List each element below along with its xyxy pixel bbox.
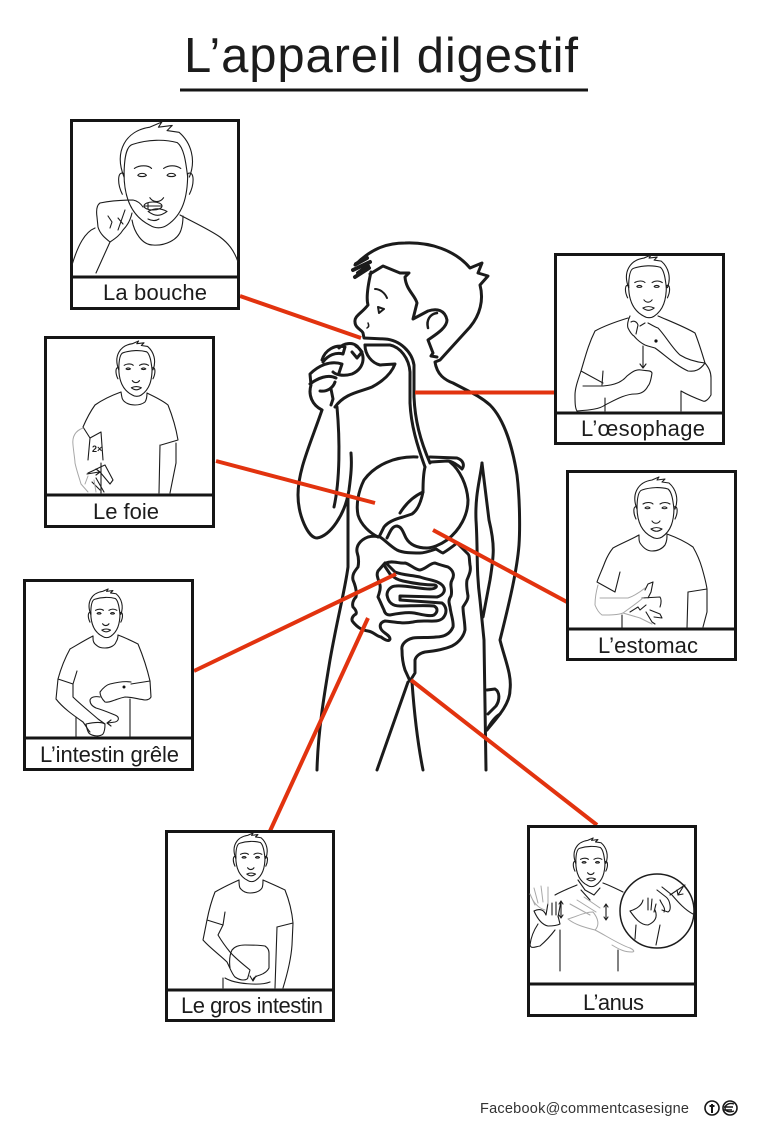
- icon: creative commons licence: [705, 1101, 737, 1115]
- ghost arm: [73, 428, 96, 492]
- sign figure: œsophage: [575, 255, 711, 411]
- ghost arm: [595, 585, 652, 624]
- label: l'estomac: L’estomac: [598, 633, 698, 658]
- red line: anus: [411, 680, 597, 825]
- label: le gros intestin: Le gros intestin: [181, 993, 323, 1018]
- sign figure: gros intestin: [203, 833, 293, 988]
- red line: large intestine: [270, 618, 368, 831]
- sign figure: anus: [530, 838, 694, 971]
- red line: esophagus: [415, 390, 555, 394]
- repeat mark: 2×: [92, 444, 102, 454]
- sign figure: foie: [83, 341, 178, 493]
- marker dot: [654, 339, 658, 343]
- panel: l'estomac: [566, 472, 737, 660]
- panel: la bouche: [70, 120, 240, 308]
- sign figure: estomac: [597, 477, 707, 628]
- panel: l'œsophage: [554, 254, 725, 444]
- red line: small intestine: [194, 574, 396, 671]
- panel: l'intestin grêle: [23, 580, 194, 770]
- red line: stomach: [433, 530, 567, 602]
- label: le foie: Le foie: [93, 499, 159, 524]
- body outline: [298, 243, 520, 770]
- panel: le gros intestin: [165, 832, 335, 1020]
- red line: liver: [216, 461, 375, 503]
- sign figure: intestin grêle: [56, 589, 151, 737]
- footer credit: Facebook@commentcasesigne: [480, 1101, 689, 1117]
- panel: l'anus: [527, 826, 697, 1016]
- title: L’appareil digestif: [184, 29, 578, 83]
- label: la bouche: La bouche: [103, 280, 207, 305]
- sign figure: bouche: [72, 122, 238, 273]
- human body with digestive system: [194, 243, 597, 831]
- label: l'œsophage: L’œsophage: [581, 416, 705, 441]
- label: l'intestin grêle: L’intestin grêle: [40, 742, 179, 767]
- large and small intestine: [352, 536, 470, 681]
- marker dot: [122, 686, 126, 688]
- liver and stomach: [357, 457, 468, 548]
- red line: mouth: [240, 296, 361, 338]
- panel: le foie: [44, 338, 215, 526]
- ghost hands: [530, 886, 634, 952]
- label: l'anus: L’anus: [583, 990, 644, 1015]
